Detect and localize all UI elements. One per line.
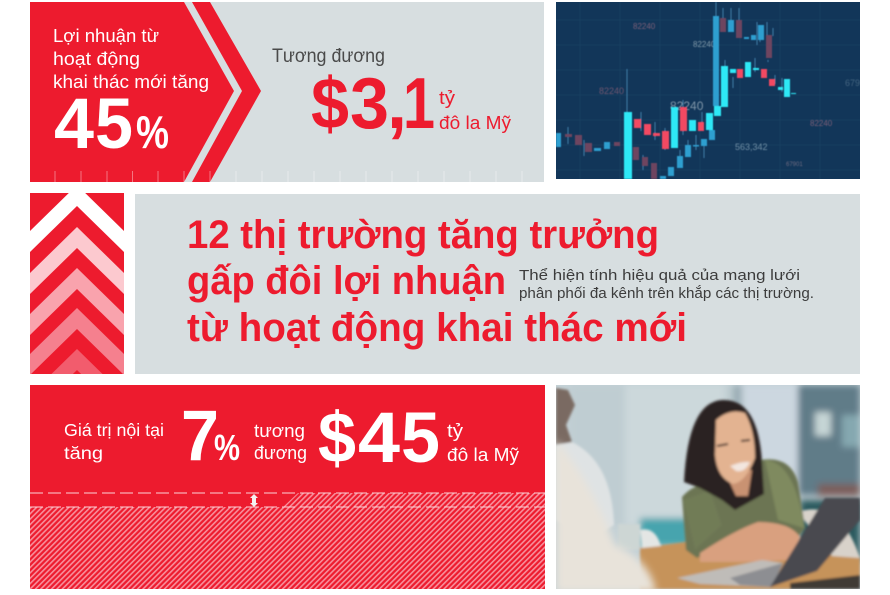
laptop screen	[770, 498, 860, 587]
table	[640, 540, 860, 589]
arm	[700, 522, 800, 562]
stat: $3,1: 1	[403, 64, 435, 144]
panel: embedded value	[30, 385, 545, 589]
embedded value label: Giá trị nội tại	[64, 420, 164, 440]
photo: candlestick chart: 82240	[670, 99, 704, 113]
photo: candlestick chart: 563,342	[735, 142, 768, 152]
decorative chevron panel	[30, 193, 124, 374]
profit label: khai thác mới tăng	[53, 71, 209, 92]
photo: candlestick chart: 82240	[810, 119, 833, 128]
photo: candlestick chart	[556, 2, 860, 179]
photo: candlestick chart: 82240	[633, 22, 656, 31]
photo: candlestick chart: 82240	[693, 40, 716, 49]
stat: $45: 5	[401, 399, 440, 478]
laptop base	[677, 560, 783, 587]
red arrow banner	[30, 2, 261, 182]
stat: $45: $	[318, 399, 356, 478]
stat: $3,1: $	[311, 64, 349, 144]
equivalent label: Tương đương	[272, 46, 385, 67]
headline: 12 thị trường tăng trưởng	[187, 213, 659, 257]
unit: billion USD: đô la Mỹ	[439, 113, 511, 133]
headline: từ hoạt động khai thác mới	[187, 306, 687, 350]
stat: $3,1: 3	[350, 64, 389, 144]
woman shirt	[682, 459, 805, 558]
supporting text: Thể hiện tính hiệu quả của mạng lưới	[519, 267, 800, 284]
face	[715, 412, 755, 484]
embedded value label: tăng	[64, 443, 103, 463]
photo: candlestick chart: 67901	[786, 162, 803, 168]
unit: billion USD: tỷ	[447, 421, 463, 441]
stat: 45%: 5	[95, 85, 133, 164]
photo: candlestick chart: 679	[845, 78, 860, 88]
neck	[724, 470, 752, 496]
foreground person	[556, 440, 656, 592]
sofa white	[798, 509, 860, 558]
stat: 45%: %	[136, 106, 169, 158]
photo: candlestick chart: 82240	[599, 86, 624, 96]
stat: 7%: 7	[181, 397, 219, 476]
stat: 45%: 4	[54, 85, 95, 164]
profit label: hoạt động	[53, 48, 140, 69]
panel: 12 markets headline	[135, 194, 860, 374]
panel: profit growth	[30, 2, 544, 182]
unit: billion USD: tỷ	[439, 88, 455, 108]
stat: 7%: %	[214, 427, 240, 468]
equivalent label: đương	[254, 443, 307, 463]
hair back	[684, 400, 764, 510]
headline: gấp đôi lợi nhuận	[187, 259, 506, 303]
equivalent label: tương	[254, 421, 305, 441]
stat: $45: 4	[358, 399, 401, 478]
behind person	[556, 440, 614, 528]
unit: billion USD: đô la Mỹ	[447, 445, 519, 465]
icon: double arrow	[250, 494, 258, 507]
stat: $3,1: ,	[387, 64, 407, 144]
profit label: Lợi nhuận từ	[53, 25, 159, 46]
photo: woman at laptop	[556, 385, 860, 592]
supporting text: phân phối đa kênh trên khắp các thị trường.	[519, 285, 814, 302]
